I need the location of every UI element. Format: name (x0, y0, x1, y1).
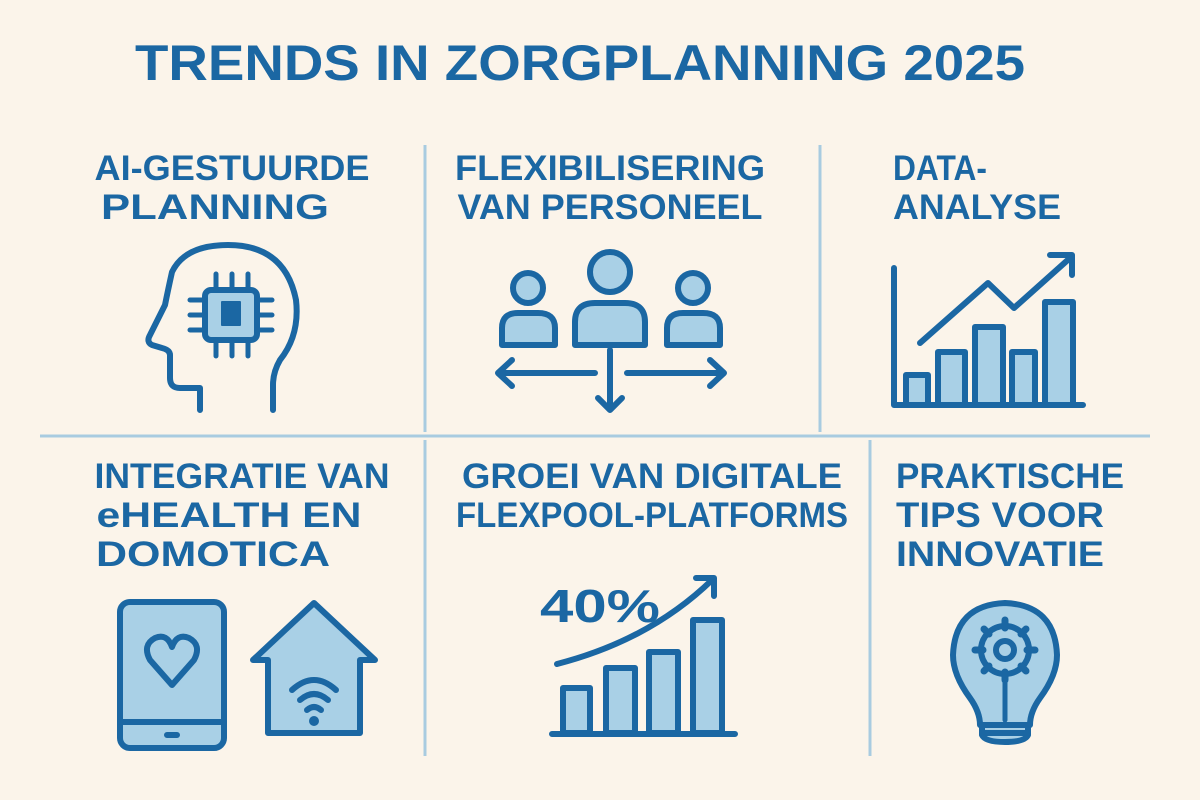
panel: data-analyse (893, 149, 1083, 405)
icon: head with chip (148, 245, 297, 410)
icon: lightbulb with gear (953, 603, 1057, 742)
heading: data-analyse: ANALYSE (893, 188, 1061, 227)
icon: tablet with heart (120, 602, 224, 748)
heading: integratie van ehealth: DOMOTICA (96, 535, 330, 574)
heading: flexibilisering van personeel: FLEXIBILISERING (455, 149, 765, 188)
title: TRENDS IN ZORGPLANNING 2025 (135, 35, 1025, 91)
icon: house with wifi (253, 603, 375, 733)
heading: AI-gestuurde planning: PLANNING (101, 188, 329, 227)
heading: groei van digitale flexpool-platforms: GROEI VAN DIGITALE (462, 457, 842, 496)
icon: bar chart with trend (894, 255, 1083, 405)
heading: praktische tips voor innovatie: TIPS VOOR (896, 496, 1104, 535)
panel: praktische tips (896, 457, 1124, 742)
icon: growth bar chart (552, 578, 735, 734)
heading: praktische tips voor innovatie: PRAKTISCHE (896, 457, 1124, 496)
heading: AI-gestuurde planning: AI-GESTUURDE (94, 149, 370, 188)
heading: groei van digitale flexpool-platforms: FLEXPOOL-PLATFORMS (456, 496, 848, 535)
panel: eHealth en domotica (94, 457, 390, 748)
heading: flexibilisering van personeel: VAN PERSONEEL (458, 188, 762, 227)
panel: flexibilisering (455, 149, 765, 410)
heading: data-analyse: DATA- (893, 149, 987, 188)
heading: praktische tips voor innovatie: INNOVATIE (896, 535, 1104, 574)
panel: AI-gestuurde planning (94, 149, 370, 410)
heading: integratie van ehealth: INTEGRATIE VAN (94, 457, 390, 496)
heading: integratie van ehealth: eHEALTH EN (96, 496, 362, 535)
icon: people with arrows (498, 252, 724, 410)
panel: flexpool-platforms (456, 457, 848, 734)
stat: 40%: 40% (540, 580, 660, 632)
